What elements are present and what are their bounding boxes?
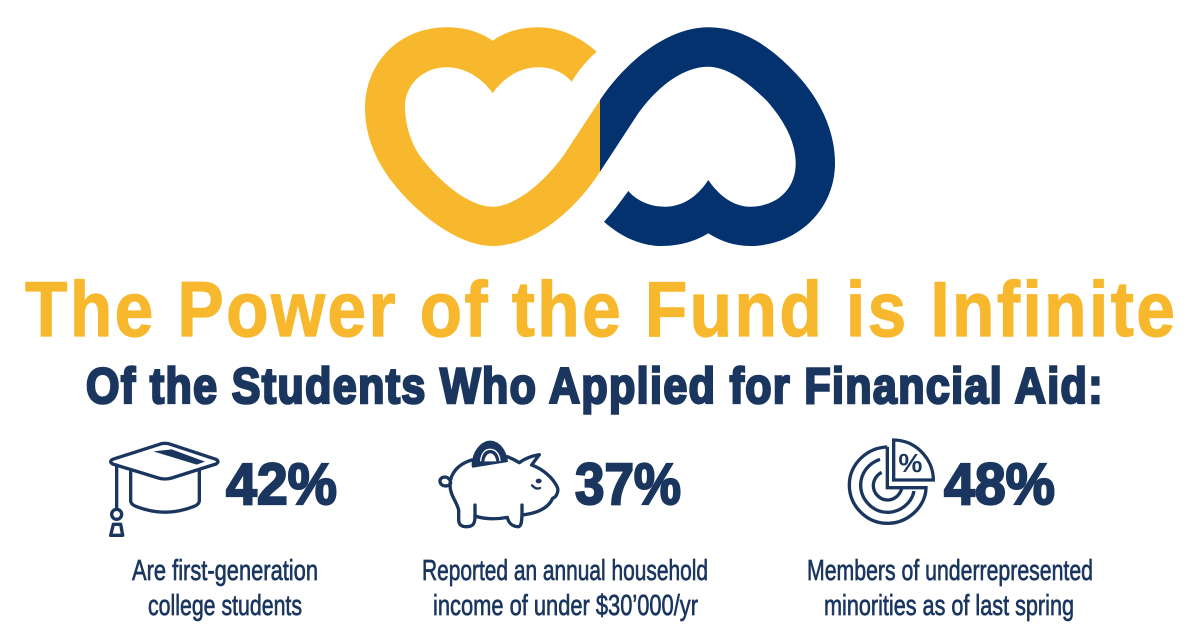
percentage: 37%: 37%	[575, 452, 681, 517]
icon: piggy bank	[440, 441, 558, 527]
caption: first-generation: college students	[148, 590, 302, 622]
stat: underrepresented minorities	[807, 440, 1093, 622]
logo: yellow heart loop	[365, 27, 600, 246]
title: The Power of the Fund is Infinite	[25, 265, 1175, 353]
subtitle: Of the Students Who Applied for Financial Aid:	[86, 358, 1103, 414]
stat: first-generation students	[111, 443, 337, 622]
caption: first-generation: Are first-generation	[132, 555, 318, 587]
percentage: 48%: 48%	[944, 452, 1055, 517]
caption: household income	[422, 555, 708, 622]
caption: first-generation	[132, 555, 318, 622]
caption: household income: income of under $30’000/yr	[433, 590, 698, 622]
caption: household income: Reported an annual household	[422, 555, 708, 587]
logo: navy heart loop	[600, 27, 835, 246]
caption: minorities	[807, 555, 1093, 622]
logo: heart infinity	[365, 27, 835, 246]
percentage: 42%: 42%	[226, 452, 337, 517]
icon: pie chart: %	[898, 448, 922, 478]
icon: graduation cap	[111, 443, 218, 535]
stat: household income	[422, 441, 708, 622]
caption: minorities: Members of underrepresented	[807, 555, 1093, 587]
icon: pie chart	[849, 440, 933, 523]
caption: minorities: minorities as of last spring	[824, 590, 1074, 622]
